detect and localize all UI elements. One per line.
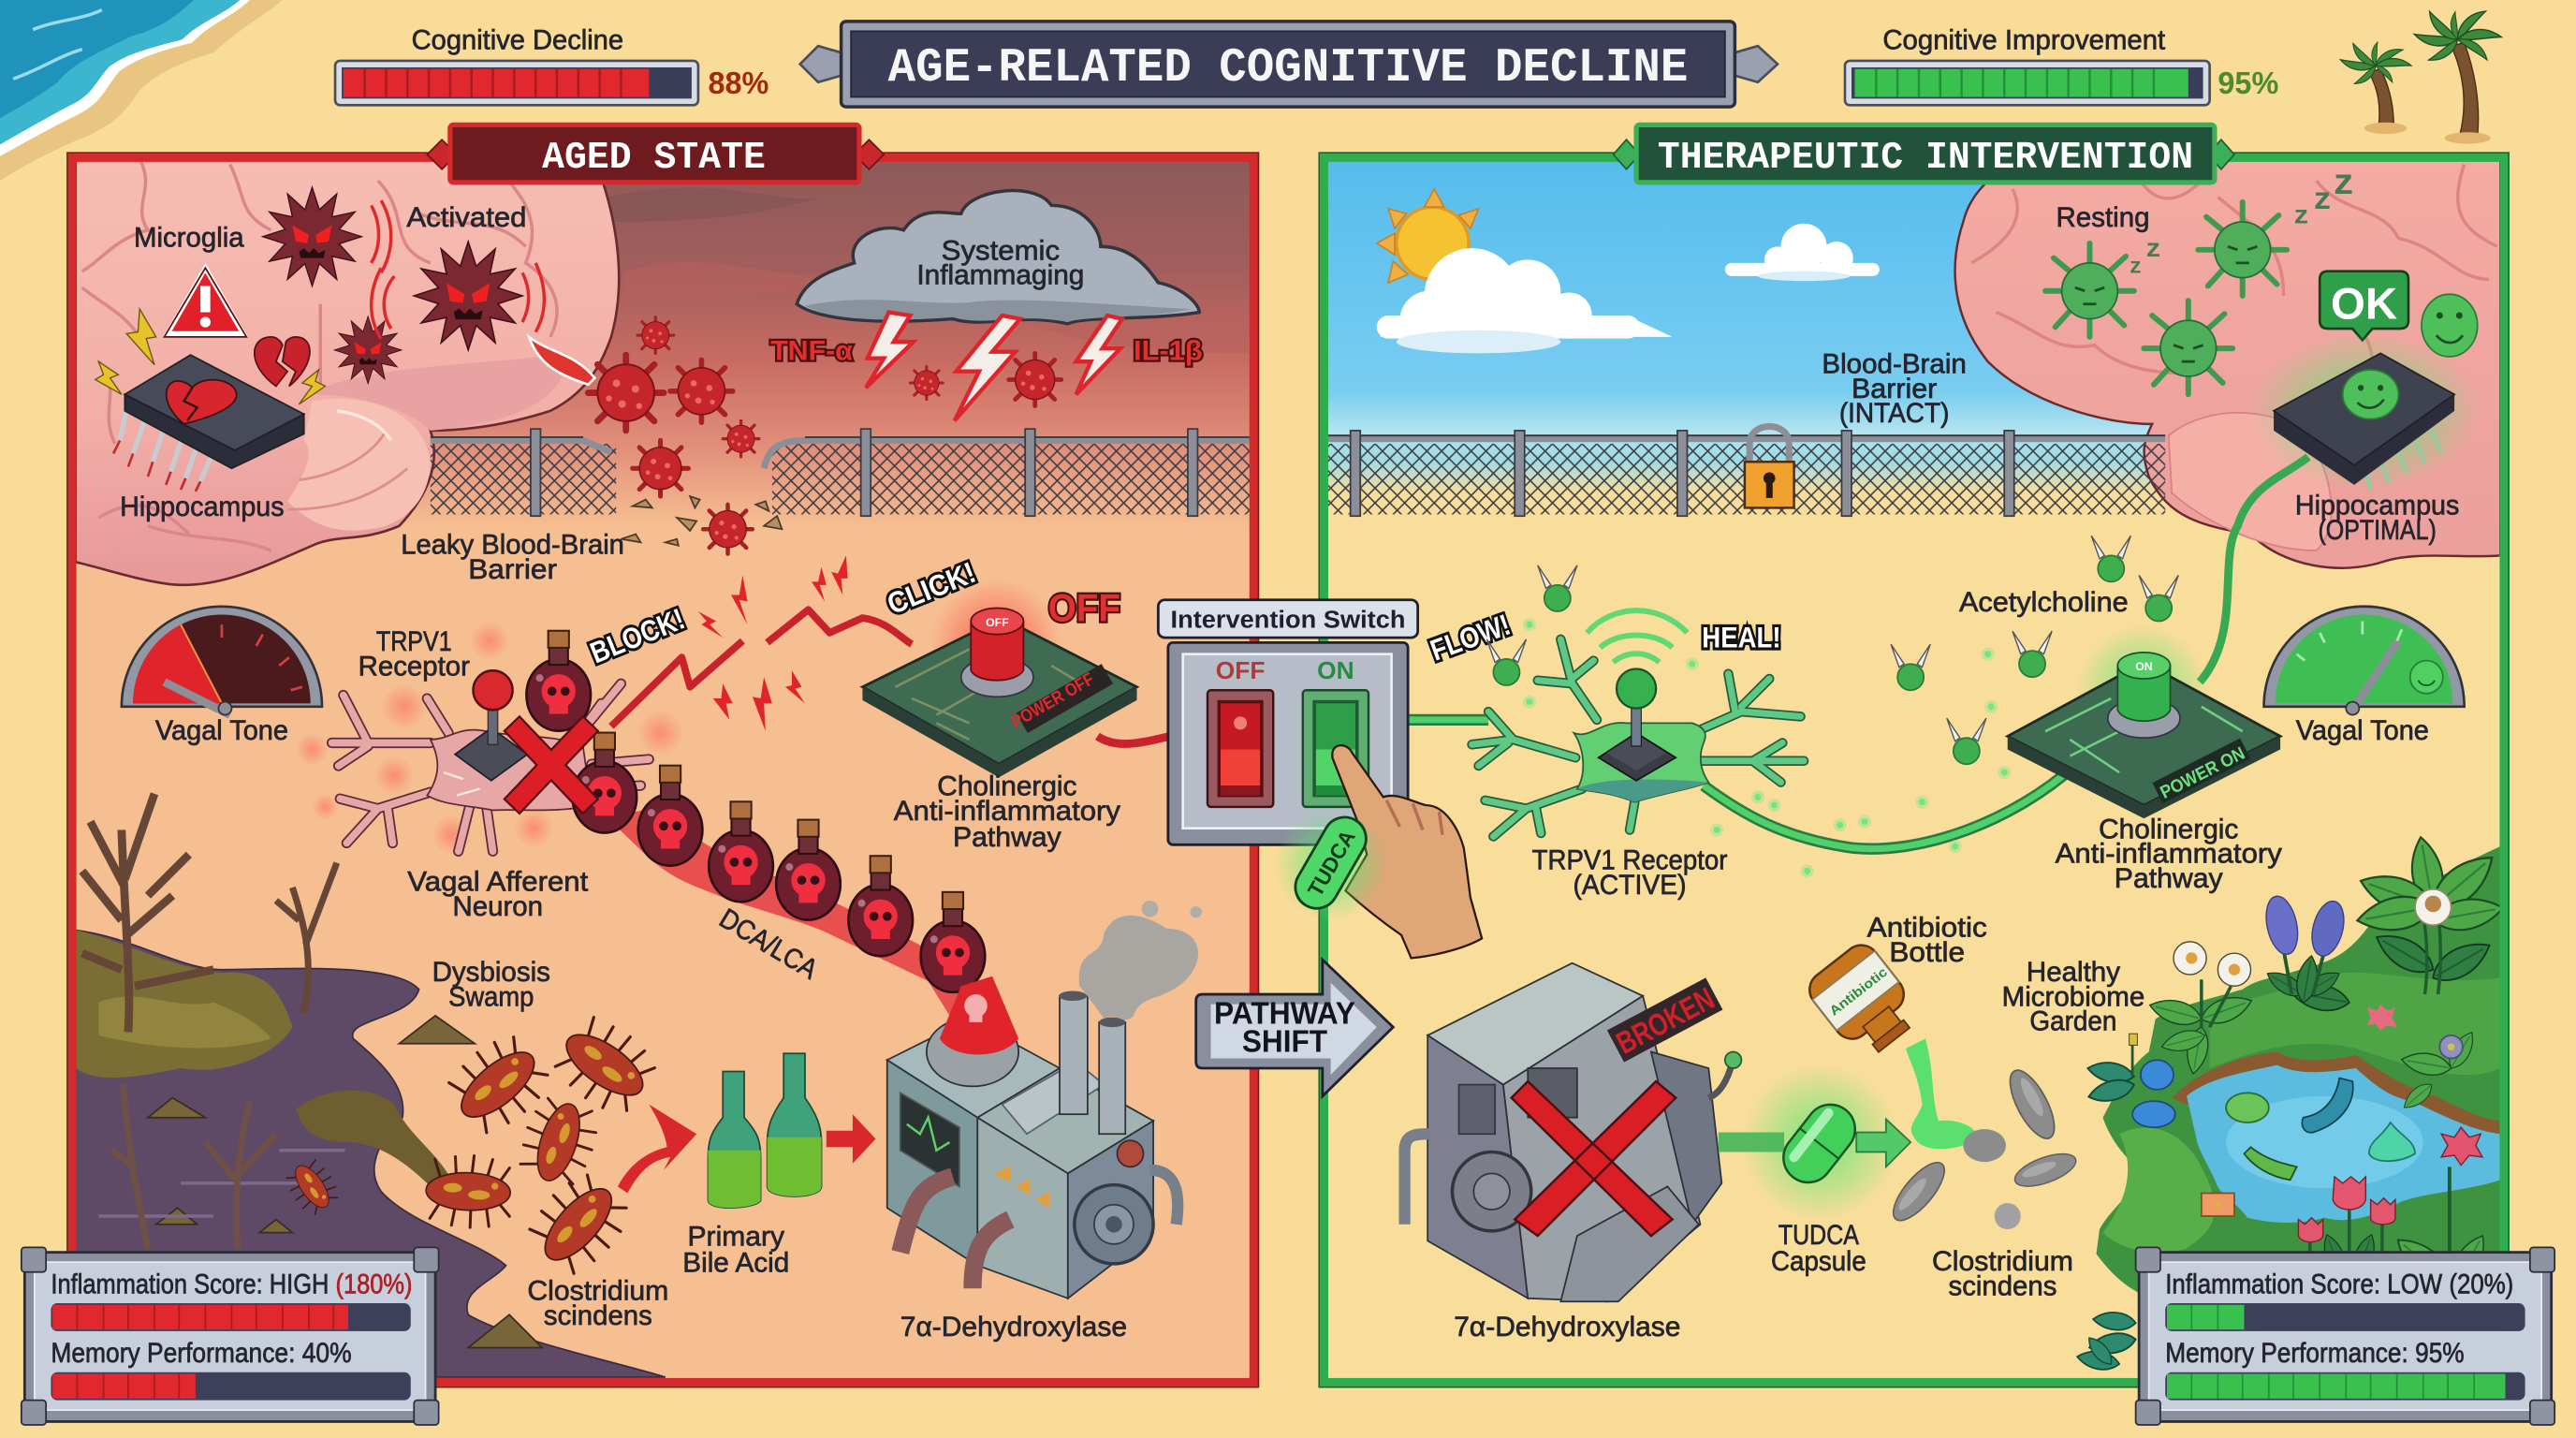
panel heading: therapeutic intervention	[1614, 125, 2234, 183]
label: leaky blood-brain barrier	[401, 530, 624, 585]
icon: padlock	[1745, 427, 1794, 507]
switch label: Intervention Switch	[1171, 606, 1405, 634]
circuit board: power off: Pathway	[953, 822, 1061, 853]
callout: OK	[2320, 271, 2408, 340]
bacteria: clostridium scindens: Clostridium	[527, 1276, 668, 1307]
storm cloud: systemic inflammaging	[770, 191, 1203, 420]
panel heading: therapeutic intervention: THERAPEUTIC INTERVENTION	[1658, 137, 2193, 180]
faded bacteria: clostridium scindens: Clostridium	[1932, 1246, 2073, 1277]
arrow: pathway shift: SHIFT	[1242, 1024, 1328, 1059]
microglia: resting: z	[2293, 203, 2309, 232]
intervention switch	[1158, 600, 1418, 844]
bacteria: clostridium scindens: scindens	[544, 1300, 652, 1331]
icon: damaged hippocampus chip	[95, 309, 326, 492]
storm cloud: systemic inflammaging: Systemic	[942, 235, 1060, 266]
red X: block	[520, 731, 583, 799]
broken machine: 7α-dehydroxylase: BROKEN	[1611, 981, 1720, 1062]
antibiotic bottle pouring: Bottle	[1889, 937, 1965, 968]
title banner: AGE-RELATED COGNITIVE DECLINE	[888, 42, 1688, 95]
neuron: vagal afferent, blocked: TRPV1	[376, 626, 452, 657]
storm cloud: systemic inflammaging: Inflammaging	[916, 260, 1084, 291]
label: hippocampus optimal: Hippocampus	[2295, 490, 2459, 521]
antibiotic bottle pouring	[1802, 913, 1987, 1149]
microglia: activated	[263, 187, 544, 384]
primary bile acid bottles	[682, 1053, 822, 1279]
circuit board: power off: OFF	[1048, 586, 1120, 630]
label: leaky blood-brain barrier: Barrier	[468, 554, 557, 585]
panel: therapeutic intervention	[1319, 153, 2509, 1387]
panel: aged state	[67, 153, 1258, 1387]
faded bacteria: clostridium scindens	[1885, 1064, 2080, 1301]
gauge: vagal tone low: Vagal Tone	[155, 715, 288, 746]
neuron: vagal afferent, blocked: Receptor	[359, 651, 470, 682]
chain-link fence: broken	[431, 429, 1251, 546]
arrow: bile acid to machine	[827, 1114, 875, 1164]
neuron: TRPV1 active: FLOW!	[1426, 608, 1515, 668]
microglia: resting: z	[2130, 255, 2142, 279]
icon: smiley	[2422, 294, 2478, 357]
bile acid trail: DCA/LCA	[526, 631, 986, 1016]
circuit board: power on: Anti-inflammatory	[2056, 839, 2282, 870]
pathogen particles crossing barrier	[588, 317, 1061, 554]
TUDCA capsule with glow and arrow	[1719, 1064, 1910, 1277]
switch: on: ON	[1317, 656, 1354, 684]
switch: on	[1303, 656, 1368, 807]
healthy microbiome garden: Garden	[2029, 1006, 2116, 1037]
acetylcholine particles: Acetylcholine	[1959, 587, 2129, 618]
ocean shoreline	[0, 0, 283, 181]
palm trees	[2340, 5, 2501, 144]
neuron: TRPV1 active: TRPV1 Receptor	[1532, 845, 1728, 876]
brain: healthy	[1955, 159, 2500, 568]
dysbiosis swamp	[76, 794, 666, 1377]
title banner	[800, 22, 1778, 107]
status panel: aged metrics	[22, 1247, 439, 1425]
icon: sun	[1377, 189, 1479, 283]
primary bile acid bottles: Bile Acid	[682, 1248, 789, 1279]
circuit board: power on: Pathway	[2115, 863, 2223, 894]
machine: 7α-dehydroxylase active: 7α-Dehydroxylase	[900, 1312, 1127, 1343]
antibiotic bottle pouring: Antibiotic	[1826, 964, 1890, 1019]
gauge: vagal tone high: Vagal Tone	[2296, 715, 2429, 746]
label: hippocampus optimal	[2295, 490, 2459, 546]
gauge: vagal tone low	[122, 607, 322, 746]
disrupted nerve signal	[585, 555, 980, 731]
status panel: therapy metrics	[2136, 1247, 2554, 1425]
TUDCA capsule with glow and arrow: TUDCA	[1778, 1220, 1859, 1251]
label: hippocampus optimal: (OPTIMAL)	[2318, 515, 2437, 546]
storm cloud: systemic inflammaging: IL-1β	[1134, 335, 1203, 366]
arrow: pathway shift	[1196, 960, 1393, 1096]
healthy microbiome garden: Microbiome	[2002, 981, 2144, 1012]
neuron: TRPV1 active: HEAL!	[1702, 621, 1781, 654]
gauge: vagal tone high	[2264, 607, 2465, 746]
acetylcholine particles	[1486, 536, 2178, 874]
icon: healthy hippocampus chip	[2250, 332, 2481, 490]
healthy microbiome garden: Healthy	[2027, 957, 2120, 988]
callout: OK: OK	[2331, 280, 2397, 330]
disrupted nerve signal: CLICK!	[883, 555, 980, 621]
dysbiosis swamp: Dysbiosis	[432, 957, 550, 988]
panel heading: aged state	[427, 125, 884, 183]
switch: off: OFF	[1216, 656, 1265, 684]
chain-link fence: intact	[1327, 431, 2165, 516]
top left meter: cognitive decline: 88%	[708, 66, 768, 101]
circuit board: power off: POWER OFF	[1008, 669, 1098, 733]
circuit board: power on: Cholinergic	[2099, 814, 2238, 844]
circuit board: power on	[2008, 624, 2282, 894]
status panel: aged metrics: Memory Performance: 40%	[51, 1338, 352, 1369]
microglia: resting	[2045, 164, 2354, 394]
microglia: resting: z	[2333, 164, 2354, 205]
icon: large cloud	[1377, 248, 1673, 353]
faded bacteria: clostridium scindens: scindens	[1949, 1270, 2056, 1301]
disrupted nerve signal: BLOCK!	[585, 601, 689, 669]
neuron: TRPV1 active	[1408, 608, 2076, 901]
healthy microbiome garden	[2002, 835, 2506, 1372]
broken machine: 7α-dehydroxylase: 7α-Dehydroxylase	[1454, 1312, 1680, 1343]
label: activated: Activated	[406, 202, 527, 233]
status panel: aged metrics: Inflammation Score: HIGH (180%)	[51, 1269, 413, 1300]
neuron: TRPV1 active: (ACTIVE)	[1573, 870, 1687, 901]
panel heading: aged state: AGED STATE	[542, 137, 766, 180]
top right meter: cognitive improvement: Cognitive Improvement	[1882, 25, 2166, 56]
icon: warning triangle	[165, 268, 246, 337]
arrow: bacteria to bile acid	[618, 1105, 696, 1193]
arrow: pathway shift: PATHWAY	[1214, 997, 1355, 1032]
circuit board: power on: POWER ON	[2158, 744, 2248, 803]
storm cloud: systemic inflammaging: TNF-α	[770, 335, 854, 366]
microglia: resting: z	[2145, 236, 2161, 265]
bacteria: clostridium scindens	[425, 1008, 668, 1331]
neuron: vagal afferent, blocked: Neuron	[453, 891, 543, 922]
pond	[2172, 1051, 2500, 1223]
label: blood-brain barrier intact: Barrier	[1852, 374, 1937, 404]
bile acid trail: DCA/LCA: DCA/LCA	[714, 903, 823, 986]
status panel: therapy metrics: Memory Performance: 95%	[2165, 1338, 2465, 1369]
label: blood-brain barrier intact: (INTACT)	[1839, 398, 1949, 429]
circuit board: power off: Cholinergic	[937, 771, 1077, 802]
label: leaky blood-brain barrier: Leaky Blood-Brain	[401, 530, 624, 561]
neuron: vagal afferent, blocked	[296, 622, 683, 922]
microglia: resting: Resting	[2056, 202, 2150, 233]
icon: small cloud	[1725, 224, 1880, 281]
TUDCA pill tag	[1275, 809, 1386, 920]
antibiotic bottle pouring: Antibiotic	[1867, 913, 1987, 944]
label: microglia: Microglia	[134, 222, 244, 253]
hand pressing switch	[1332, 745, 1482, 958]
label: blood-brain barrier intact	[1822, 348, 1967, 429]
neuron: vagal afferent, blocked: Vagal Afferent	[407, 866, 589, 897]
label: hippocampus: Hippocampus	[120, 492, 285, 522]
status panel: therapy metrics: Inflammation Score: LOW (20%)	[2165, 1269, 2513, 1300]
circuit board: power off: OFF	[986, 616, 1009, 629]
primary bile acid bottles: Primary	[688, 1222, 784, 1253]
TUDCA capsule with glow and arrow: Capsule	[1771, 1246, 1866, 1277]
icon: inflamed brain tear	[529, 337, 594, 385]
top right meter: cognitive improvement	[1845, 25, 2278, 105]
brain: aged	[76, 159, 619, 585]
circuit board: power off	[862, 579, 1170, 853]
top left meter: cognitive decline: Cognitive Decline	[412, 25, 623, 56]
top right meter: cognitive improvement: 95%	[2217, 66, 2278, 101]
switch: off	[1208, 656, 1273, 807]
top left meter: cognitive decline	[335, 25, 768, 105]
switch label	[1158, 600, 1418, 638]
TUDCA pill tag: TUDCA	[1303, 826, 1360, 901]
machine: 7α-dehydroxylase active	[887, 901, 1202, 1343]
nerve cable to brain	[2200, 457, 2308, 682]
dysbiosis swamp: Swamp	[448, 981, 534, 1012]
label: blood-brain barrier intact: Blood-Brain	[1822, 348, 1967, 379]
circuit board: power on: ON	[2135, 660, 2153, 673]
garden plants	[2076, 835, 2506, 1372]
broken machine: 7α-dehydroxylase	[1405, 963, 1741, 1343]
microglia: resting: z	[2313, 183, 2332, 219]
switch plate	[1168, 642, 1408, 844]
circuit board: power off: Anti-inflammatory	[894, 796, 1120, 827]
